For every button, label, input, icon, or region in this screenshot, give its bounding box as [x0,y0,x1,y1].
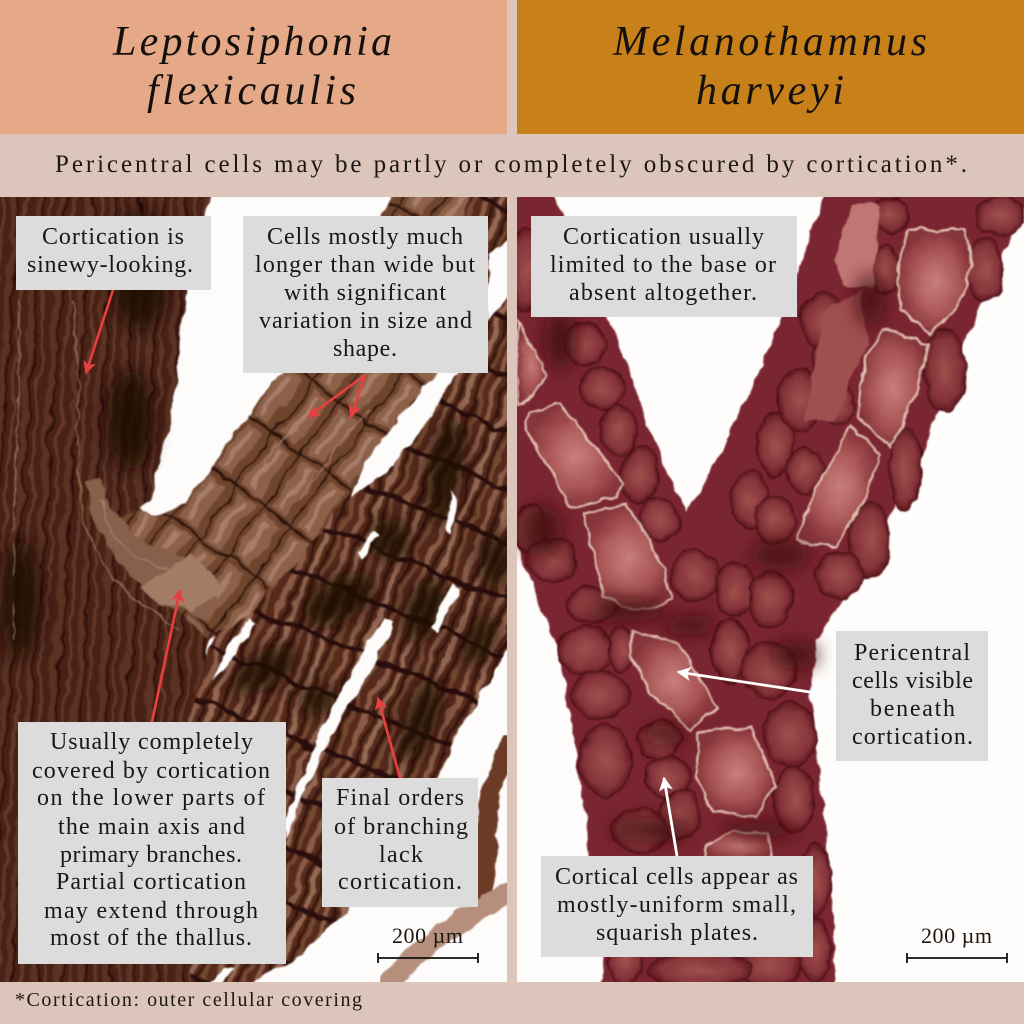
callout: cortical cells [541,856,813,957]
callout: cell length [243,216,488,373]
scale bar: left [378,923,478,963]
header: Leptosiphonia flexicaulis [0,0,507,134]
panel: Leptosiphonia micrograph [0,190,520,990]
callout: lower parts covered: the main axis and [58,814,245,840]
callout: final orders: Final orders [336,785,464,811]
upper branch and bend [120,197,471,640]
callout: limited cortication: absent altogether. [569,280,757,306]
callout: lower parts covered: on the lower parts of [37,785,265,811]
callout: final orders [322,778,478,907]
callout: final orders: cortication. [338,869,462,895]
header: Leptosiphonia flexicaulis: flexicaulis [147,68,356,114]
pale gaps between strands [205,232,520,990]
header: Melanothamnus harveyi: harveyi [696,68,844,114]
callout: lower parts covered [18,722,286,964]
Y-shaped thallus [510,190,1024,990]
large pericentral cells [517,230,974,860]
callout: limited cortication [531,216,797,317]
callout: final orders: of branching [334,814,468,840]
arrow: to sinewy cortication [86,290,113,373]
arrows: to long cells [308,375,365,417]
callout: cell length: shape. [333,336,397,362]
callout: cell length: Cells mostly much [267,224,463,250]
callout: pericentral visible [836,631,988,761]
callout: lower parts covered: Usually completely [50,729,253,755]
callout: pericentral visible: cortication. [852,724,973,750]
callout: cell length: longer than wide but [255,252,475,278]
subtitle band text: Pericentral cells may be partly or completely obscured by cortication*. [55,151,967,178]
header: Melanothamnus harveyi [517,0,1024,134]
dark blotches [518,274,884,842]
callout: cell length: variation in size and [259,308,472,334]
callout: final orders: lack [379,842,423,868]
final branch strands [380,735,515,990]
bend highlights [85,480,216,620]
callout: sinewy cortication [16,216,211,290]
footnote: *Cortication: outer cellular covering [15,989,362,1011]
scale bar: right [907,923,1007,963]
header: Melanothamnus harveyi: Melanothamnus [612,19,927,65]
callout: pericentral visible: cells visible [852,668,973,694]
main axis [0,190,213,990]
pale upper strip [835,205,880,287]
callout: cortical cells: Cortical cells appear as [555,864,798,890]
arrow: to pericentral cell [678,672,836,696]
callout: limited cortication: limited to the base or [550,252,776,278]
arrow: to final branches [378,698,400,778]
callout: pericentral visible: Pericentral [854,640,970,666]
panel: Melanothamnus micrograph [510,190,1024,990]
callout: limited cortication: Cortication usually [563,224,764,250]
scale bar: right: 200 µm [921,923,992,948]
callout: lower parts covered: may extend through [44,898,258,924]
callout: lower parts covered: most of the thallus. [50,925,252,951]
callout: cortical cells: mostly-uniform small, [557,892,796,918]
callout: lower parts covered: primary branches. [60,842,242,868]
callout: lower parts covered: covered by cortication [32,758,270,784]
callout: sinewy cortication: Cortication is [42,224,184,250]
arrow: to covered axis [152,590,180,722]
scale bar: left: 200 µm [392,923,463,948]
dark blotches [0,210,511,769]
callout: sinewy cortication: sinewy-looking. [27,252,193,278]
strands region [187,197,507,982]
cortical cells [510,195,1024,988]
callout: pericentral visible: beneath [870,696,955,722]
header: Leptosiphonia flexicaulis: Leptosiphonia [112,19,392,65]
callout: lower parts covered: Partial cortication [56,869,246,895]
sinewy lines [13,300,370,640]
callout: cell length: with significant [284,280,446,306]
callout: cortical cells: squarish plates. [596,920,758,946]
arrow: to cortical cells [664,778,677,856]
